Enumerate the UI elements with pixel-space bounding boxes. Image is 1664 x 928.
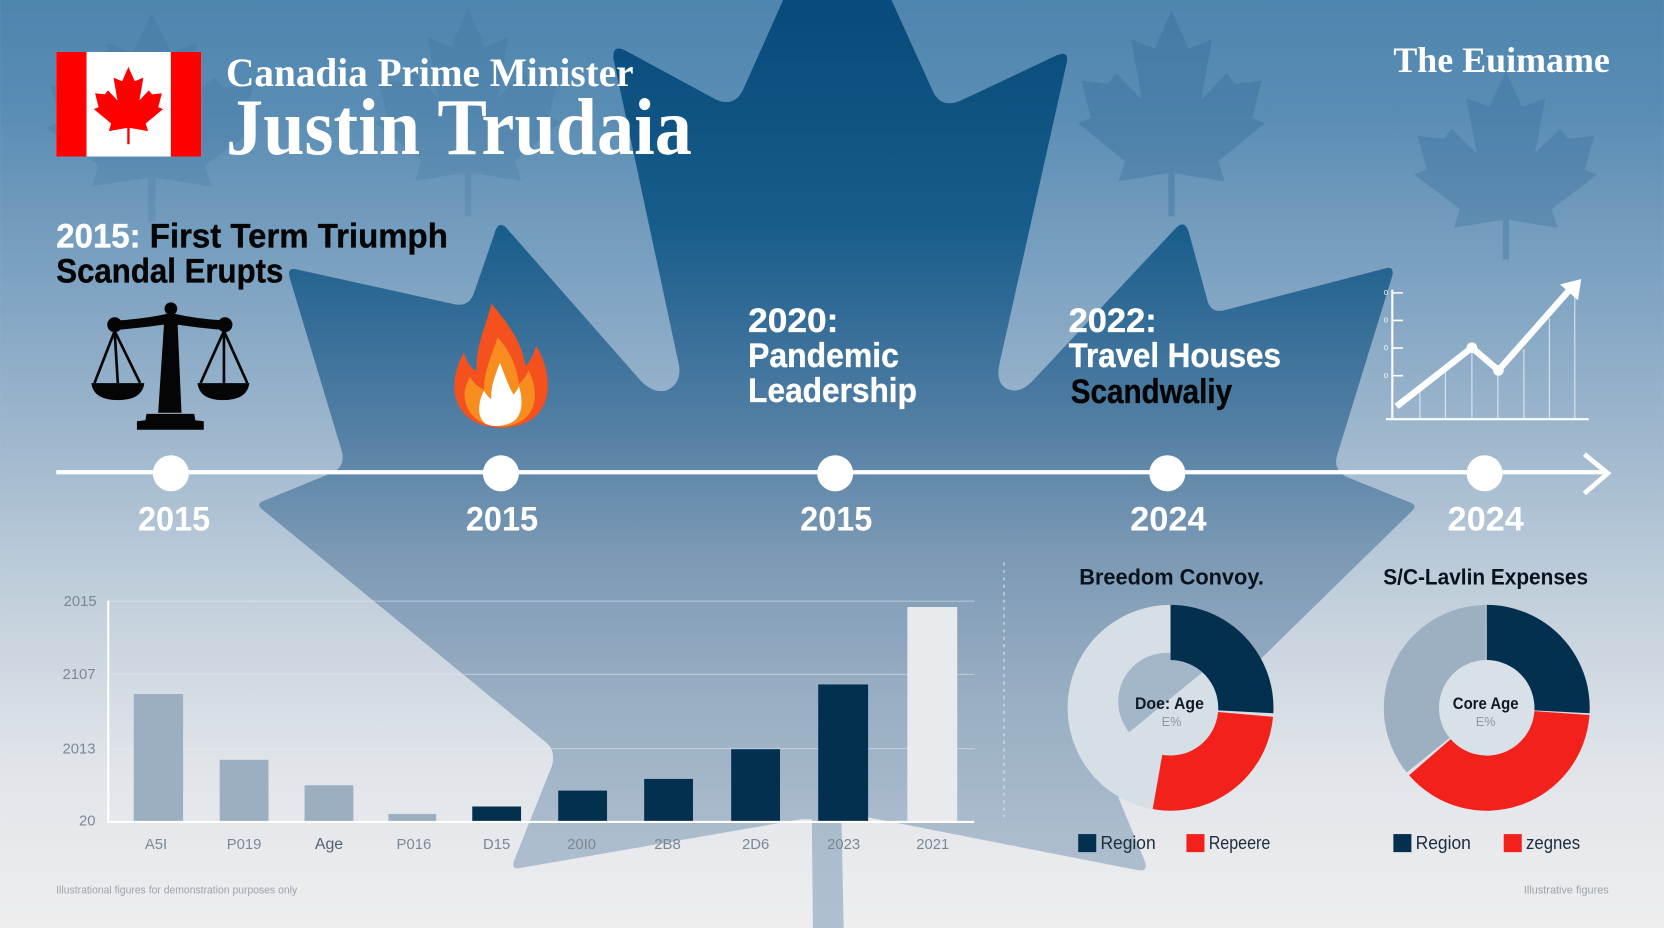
flag of Canada xyxy=(56,52,201,157)
icon: rising line chart: 0 xyxy=(1384,316,1388,325)
icon: rising line chart: 0 xyxy=(1384,371,1388,380)
background small maple leaves xyxy=(46,8,1597,260)
donut chart: Breedom Convoy: E% xyxy=(1162,714,1181,729)
large central maple leaf xyxy=(259,0,1415,928)
icon: rising line chart xyxy=(1384,279,1589,419)
donut chart: SC-Lavlin Expenses: S/C-Lavlin Expenses xyxy=(1383,565,1588,590)
bar chart: D15 xyxy=(483,837,510,853)
bar chart: Age xyxy=(315,836,343,853)
bar chart: 2B8 xyxy=(654,837,681,853)
bar chart: P019 xyxy=(227,837,261,853)
timeline year labels: 2024 xyxy=(1447,501,1524,539)
footer credit: Illustrative figures xyxy=(1524,885,1609,897)
heading: 2015 first term: 2015: First Term Triumph xyxy=(56,217,448,255)
legend: left donut: Repeere xyxy=(1209,833,1270,853)
bar chart: 2021 xyxy=(916,837,949,853)
icon: scales of justice xyxy=(91,302,249,430)
legend: left donut: Region xyxy=(1100,833,1156,853)
heading: 2015 first term: Scandal Erupts xyxy=(56,252,283,290)
title: Justin Trudaia xyxy=(226,83,692,172)
donut chart: Breedom Convoy: Doe: Age xyxy=(1135,694,1204,713)
bar chart: 2D6 xyxy=(742,837,769,853)
heading: 2022 travel houses: 2022: xyxy=(1069,302,1157,340)
legend: right donut: zegnes xyxy=(1526,833,1580,853)
timeline year labels: 2015 xyxy=(138,501,210,539)
bar chart: 20I0 xyxy=(567,837,596,853)
heading: 2020 pandemic leadership: Leadership xyxy=(748,372,917,410)
icon: rising line chart: 0 xyxy=(1384,343,1388,352)
donut chart: Breedom Convoy xyxy=(1068,565,1273,811)
timeline year labels xyxy=(138,501,1524,539)
heading: 2022 travel houses xyxy=(1069,302,1281,411)
legend: left donut xyxy=(1078,833,1270,853)
heading: 2020 pandemic leadership: 2020: xyxy=(748,302,838,340)
publisher name: The Euimame xyxy=(1393,40,1610,80)
donut chart: SC-Lavlin Expenses xyxy=(1383,565,1590,811)
arrow head xyxy=(1584,454,1608,493)
bar chart xyxy=(63,594,974,853)
bar chart: 2107 xyxy=(63,667,96,683)
bar chart: A5I xyxy=(145,837,167,853)
timeline year labels: 2015 xyxy=(800,501,872,539)
timeline xyxy=(56,454,1608,493)
donut chart: Breedom Convoy: Breedom Convoy. xyxy=(1079,565,1264,590)
timeline markers xyxy=(153,455,1503,491)
bar chart: 2023 xyxy=(827,837,860,853)
donut chart: SC-Lavlin Expenses: Core Age xyxy=(1453,694,1519,713)
timeline year labels: 2024 xyxy=(1130,501,1207,539)
heading: 2020 pandemic leadership xyxy=(748,302,917,410)
timeline year labels: 2015 xyxy=(466,501,538,539)
bar chart: P016 xyxy=(397,837,431,853)
legend: right donut xyxy=(1393,833,1580,853)
bar chart: 2013 xyxy=(63,741,96,757)
donut chart: SC-Lavlin Expenses: E% xyxy=(1476,714,1496,729)
heading: 2020 pandemic leadership: Pandemic xyxy=(748,337,899,375)
heading: 2022 travel houses: Travel Houses xyxy=(1069,337,1281,375)
bar chart: 20 xyxy=(79,814,96,830)
legend: right donut: Region xyxy=(1416,833,1471,853)
title xyxy=(226,50,692,172)
footer source note: Illustrational figures for demonstration purposes only xyxy=(56,885,298,897)
icon: rising line chart: 0 xyxy=(1384,288,1388,297)
title: Canadia Prime Minister xyxy=(226,50,634,95)
heading: 2022 travel houses: Scandwaliy xyxy=(1071,373,1232,411)
icon: flame xyxy=(454,303,548,428)
bar chart: 2015 xyxy=(64,594,97,610)
heading: 2015 first term xyxy=(56,217,448,290)
